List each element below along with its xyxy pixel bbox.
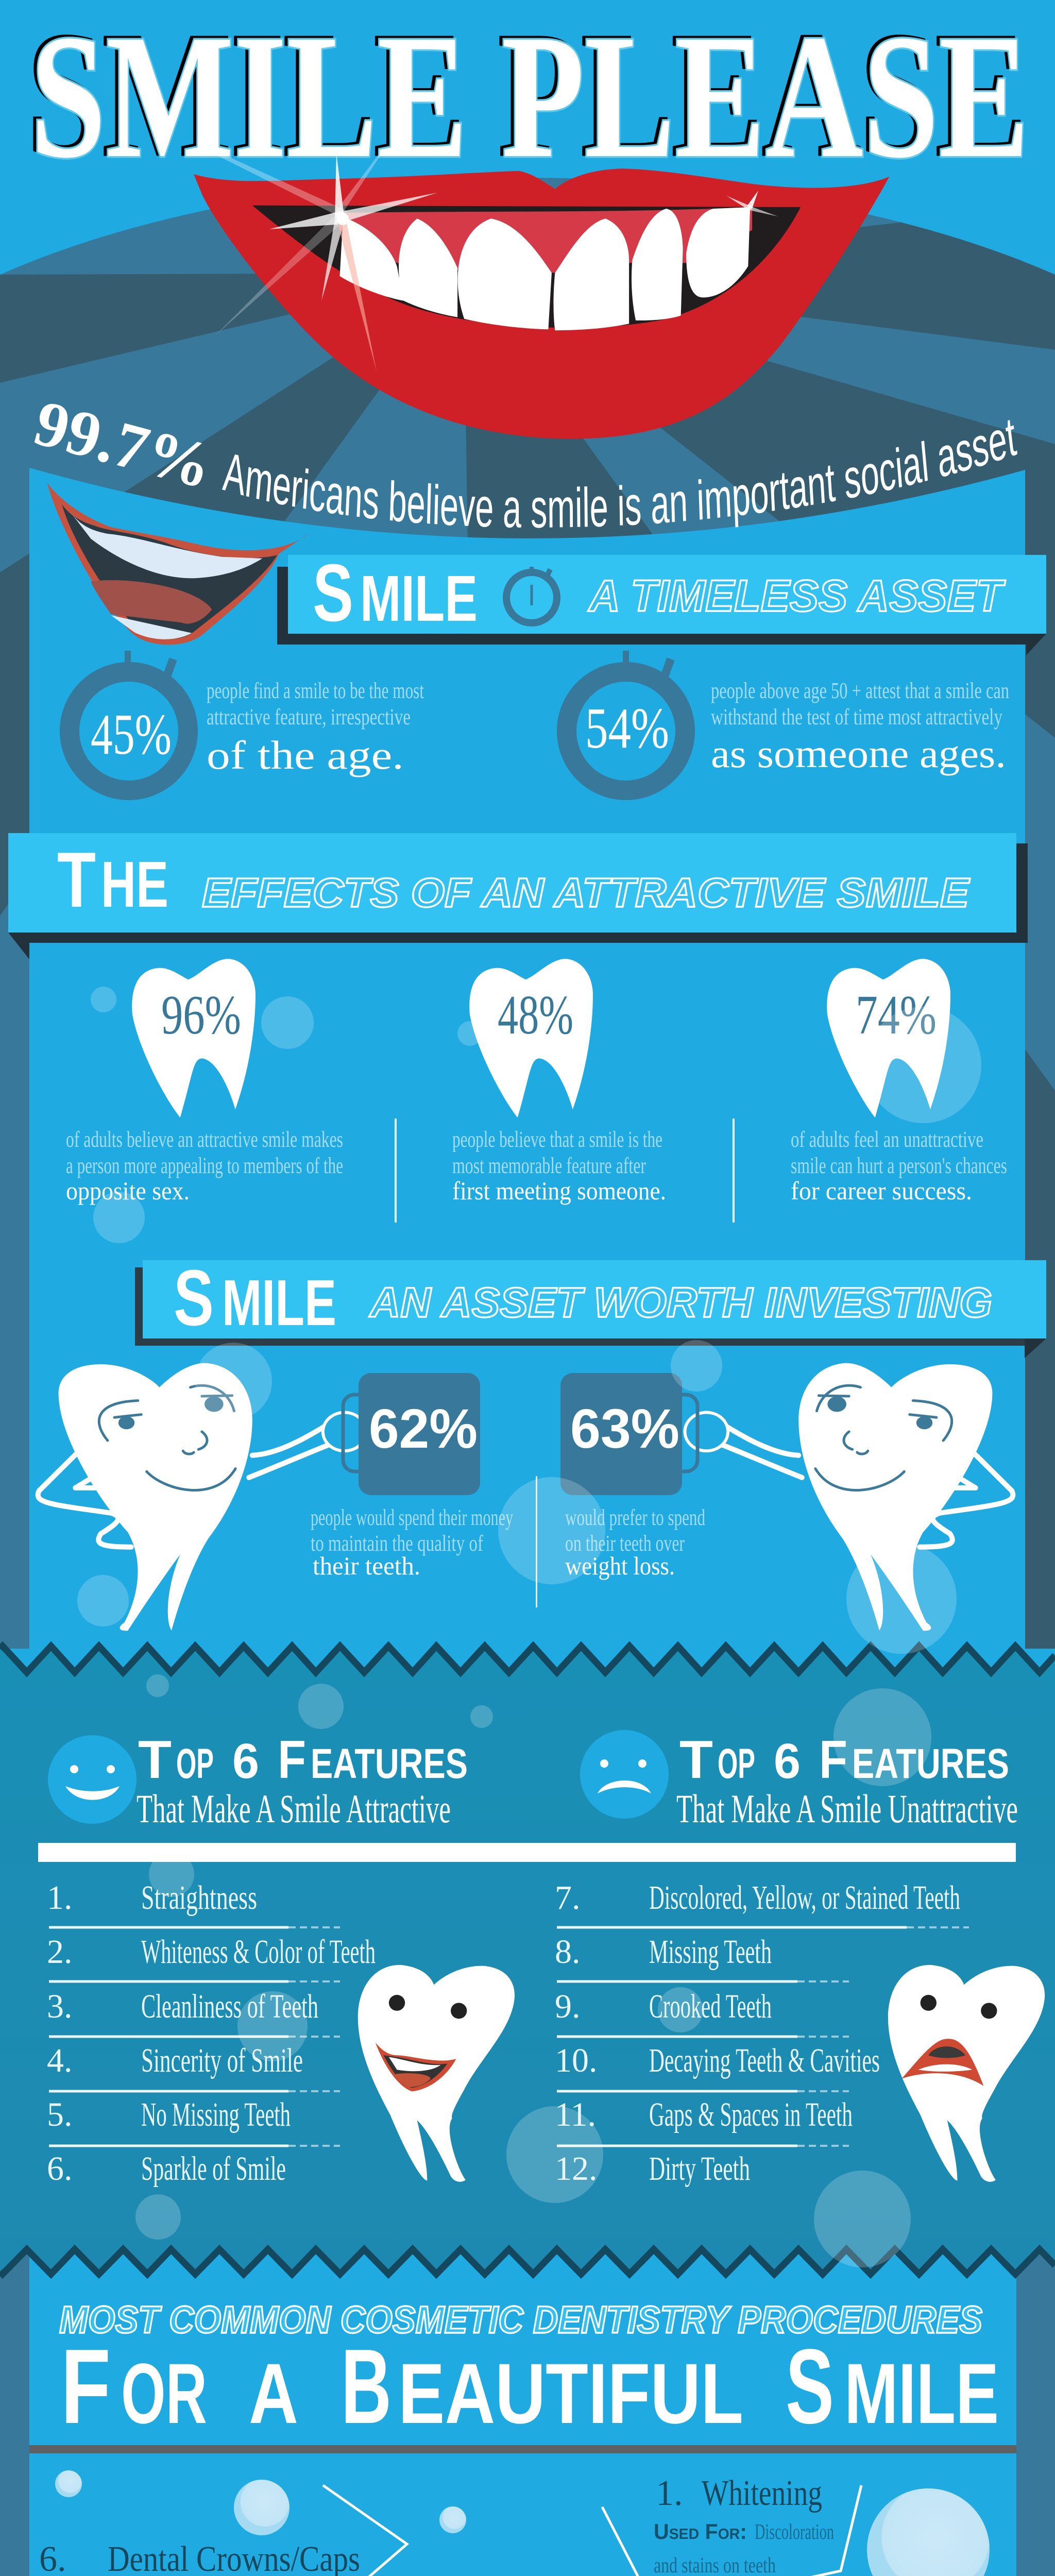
stat: 99.7 percent: Americans believe a smile is an important social asset: [222, 420, 1017, 528]
section: procedures panel: [0, 2241, 1055, 2576]
mug stat: 62 percent: [343, 1373, 480, 1495]
heading: top features attractive: 6: [232, 1734, 259, 1789]
stat: 99.7 percent: [27, 387, 1017, 560]
stopwatch stat: 45 percent: people find a smile to be the most: [207, 678, 424, 703]
list: attractive features: [47, 1879, 376, 2188]
text: invest 62 percent: people would spend their money: [311, 1505, 513, 1530]
list: unattractive features: 8.: [555, 1933, 580, 1971]
stopwatch stat: 54 percent: 54%: [585, 697, 669, 760]
text: effects 48 percent: most memorable feature after: [452, 1153, 646, 1178]
sparkle on lips: [215, 151, 778, 371]
list: unattractive features: 11.: [555, 2096, 596, 2133]
list: unattractive features: 12.: [555, 2150, 598, 2188]
lips illustration: [194, 168, 890, 439]
icon: smiley face: [48, 1735, 137, 1824]
heading ribbon: asset worth investing: MILE: [222, 1266, 336, 1339]
callout: 1 whitening: Whitening: [702, 2473, 822, 2513]
list: unattractive features: 7.: [555, 1879, 580, 1917]
icon: sad face: [580, 1730, 669, 1819]
stopwatch stat: 54 percent: as someone ages.: [711, 731, 1006, 776]
callout arrows: [94, 2485, 1006, 2576]
heading: top features unattractive: T: [679, 1730, 713, 1790]
list: attractive features: Sparkle of Smile: [141, 2150, 286, 2188]
heading ribbon: timeless asset: A TIMELESS ASSET: [588, 571, 1006, 621]
panel: upper blue: [29, 468, 1025, 1674]
heading ribbon: effects: EFFECTS OF AN ATTRACTIVE SMILE: [202, 870, 971, 916]
heading: top features attractive: OP: [176, 1740, 214, 1787]
text: invest 62 percent: their teeth.: [313, 1551, 420, 1580]
list: unattractive features: Dirty Teeth: [649, 2150, 750, 2188]
text: effects 96 percent: a person more appealing to members of the: [66, 1153, 343, 1178]
text: effects 74 percent: for career success.: [791, 1176, 972, 1205]
heading ribbon: timeless asset: [277, 548, 1046, 655]
text: effects 74 percent: of adults feel an unattractive: [791, 1127, 983, 1152]
character: sad tooth: [888, 1965, 1045, 2182]
mug stat: 63 percent: [560, 1373, 697, 1495]
list: unattractive features: 9.: [555, 1988, 580, 2025]
heading: procedures: A: [249, 2346, 298, 2442]
list: unattractive features: [555, 1879, 960, 2188]
stopwatch stat: 45 percent: 45%: [91, 703, 172, 767]
stat tooth: 96 percent: 96%: [161, 985, 241, 1046]
stat tooth: 74 percent: 74%: [856, 985, 937, 1046]
heading: top features attractive: F: [278, 1730, 306, 1790]
list: unattractive features: Decaying Teeth & Cavities: [649, 2042, 880, 2079]
stat: 99.7 percent: 99.7%: [27, 387, 220, 503]
stat tooth: 74 percent: [827, 959, 950, 1117]
text: effects 96 percent: opposite sex.: [66, 1176, 190, 1205]
heading: procedures: MOST COMMON COSMETIC DENTISTRY PROCEDURES: [59, 2298, 982, 2341]
text: effects 96 percent: of adults believe an attractive smile makes: [66, 1127, 343, 1152]
text: effects 74 percent: [791, 1127, 1007, 1205]
character: tooth holding mug left: [38, 1363, 366, 1631]
heading: top features attractive: T: [138, 1730, 172, 1790]
sunburst rays: [0, 155, 1055, 1649]
mug stat: 62 percent: 62%: [369, 1397, 478, 1460]
section: teal top features background: [0, 1646, 1055, 2282]
list: attractive features: 1.: [47, 1879, 72, 1917]
list: attractive features: 5.: [47, 2096, 72, 2133]
list: attractive features: Cleanliness of Teeth: [141, 1988, 318, 2025]
icon: stopwatch: [506, 567, 557, 623]
text: effects 48 percent: people believe that a smile is the: [452, 1127, 662, 1152]
heading: procedures: MILE: [844, 2346, 999, 2442]
character: happy tooth: [358, 1965, 515, 2182]
heading ribbon: asset worth investing: AN ASSET WORTH INVESTING: [369, 1279, 992, 1326]
text: invest 63 percent: would prefer to spend: [565, 1505, 705, 1530]
text: invest 62 percent: [311, 1505, 513, 1580]
stopwatch stat: 54 percent: [567, 651, 1009, 790]
stat tooth: 96 percent: [132, 959, 256, 1117]
text: invest 63 percent: on their teeth over: [565, 1531, 685, 1556]
list: attractive features: 6.: [47, 2150, 72, 2188]
heading: procedures: B: [341, 2327, 392, 2446]
heading ribbon: timeless asset: MILE: [360, 562, 478, 635]
list: attractive features: 2.: [47, 1933, 72, 1971]
icon: open mouth: [47, 483, 310, 645]
list: attractive features: 3.: [47, 1988, 72, 2025]
list: unattractive features: Gaps & Spaces in Teeth: [649, 2096, 853, 2133]
list: attractive features: 4.: [47, 2042, 72, 2079]
heading: procedures: S: [786, 2327, 834, 2446]
text: invest 63 percent: weight loss.: [565, 1551, 675, 1580]
text: effects 48 percent: [452, 1127, 666, 1205]
heading: top features attractive: [137, 1730, 468, 1831]
heading: procedures: F: [61, 2327, 111, 2446]
list: unattractive features: 10.: [555, 2042, 598, 2079]
list: unattractive features: Missing Teeth: [649, 1933, 772, 1971]
text: invest 63 percent: [565, 1505, 705, 1580]
stat tooth: 48 percent: [469, 959, 593, 1117]
callout: 1 whitening: 1.: [656, 2473, 683, 2513]
heading ribbon: effects: HE: [101, 848, 168, 921]
heading: top features attractive: That Make A Smile Attractive: [137, 1786, 451, 1831]
heading: procedures: EAUTIFUL: [398, 2346, 743, 2442]
callout: 1 whitening: Used For:: [654, 2519, 747, 2544]
heading: procedures: [59, 2298, 999, 2446]
heading: procedures: OR: [121, 2346, 207, 2442]
stopwatch stat: 45 percent: of the age.: [207, 733, 404, 777]
text: effects 48 percent: first meeting someone.: [452, 1176, 666, 1205]
character: tooth holding mug right: [685, 1363, 1013, 1631]
heading ribbon: timeless asset: S: [313, 548, 353, 638]
text: invest 62 percent: to maintain the quality of: [311, 1531, 483, 1556]
heading ribbon: asset worth investing: S: [174, 1253, 214, 1342]
heading ribbon: effects: [8, 833, 1028, 959]
callout: 1 whitening: Discoloration: [755, 2520, 834, 2544]
list: attractive features: No Missing Teeth: [141, 2096, 291, 2133]
heading ribbon: effects: T: [57, 836, 96, 924]
stat tooth: 48 percent: 48%: [498, 985, 573, 1046]
stopwatch stat: 45 percent: [70, 651, 424, 790]
heading: top features unattractive: OP: [718, 1740, 755, 1787]
stopwatch stat: 45 percent: attractive feature, irrespective: [207, 704, 411, 730]
heading: top features unattractive: [676, 1730, 1018, 1831]
heading ribbon: asset worth investing: [135, 1253, 1046, 1358]
heading: top features unattractive: 6: [774, 1734, 801, 1789]
list: unattractive features: Crooked Teeth: [649, 1988, 772, 2025]
list: attractive features: Whiteness & Color of Teeth: [141, 1933, 376, 1971]
callout: 1 whitening: [654, 2473, 834, 2576]
callout: 6 dental crowns: [39, 2539, 360, 2576]
mug stat: 63 percent: 63%: [570, 1397, 679, 1460]
text: effects 96 percent: [66, 1127, 343, 1205]
list: attractive features: Sincerity of Smile: [141, 2042, 303, 2079]
heading: top features unattractive: F: [819, 1730, 847, 1790]
heading: top features unattractive: EATURES: [852, 1740, 1009, 1787]
heading: top features attractive: EATURES: [311, 1740, 468, 1787]
list: attractive features: Straightness: [141, 1879, 257, 1917]
